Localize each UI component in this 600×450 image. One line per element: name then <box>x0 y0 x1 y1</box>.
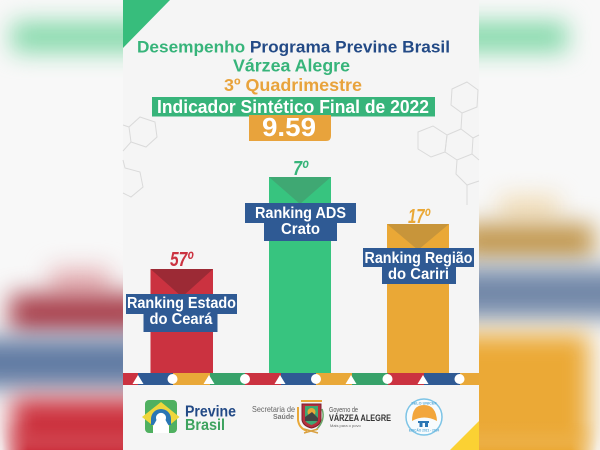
title line 2: Várzea Alegre <box>233 56 350 76</box>
logo: Secretaria de Saúde: Saúde <box>273 414 294 421</box>
logo: Secretaria de Saúde: Secretaria de <box>252 405 295 414</box>
logo: Secretaria de Saúde <box>252 405 295 421</box>
rank 7: 7º <box>293 158 309 180</box>
label: Ranking ADS Crato: Ranking ADS <box>255 205 346 222</box>
logo: Governo de Várzea Alegre: Governo de <box>329 407 358 414</box>
logo: Governo de Várzea Alegre <box>329 407 391 428</box>
label: Ranking Estado do Ceará <box>126 294 237 332</box>
logo: circular seal <box>406 399 442 435</box>
decorative coloured strip <box>123 373 479 385</box>
label: Ranking Estado do Ceará: do Ceará <box>150 311 213 328</box>
label: Ranking Região do Cariri: do Cariri <box>388 266 449 283</box>
label: Ranking Região do Cariri <box>363 248 474 284</box>
yellow corner triangle <box>450 421 479 450</box>
logo: Previne Brasil: Previne <box>185 404 236 420</box>
central panel background <box>123 0 479 450</box>
logo: Governo de Várzea Alegre: Mais para o povo <box>330 423 361 428</box>
green corner triangle <box>123 0 170 48</box>
logo: Previne Brasil <box>142 400 236 434</box>
label: Ranking Estado do Ceará: Ranking Estado <box>127 295 236 312</box>
score badge <box>249 112 331 142</box>
label: Ranking Região do Cariri: Ranking Região <box>364 250 472 267</box>
title <box>137 38 450 95</box>
indicator banner: Indicador Sintético Final de 2022 <box>157 96 429 117</box>
rank 17: 17º <box>408 206 431 228</box>
logo: Previne Brasil: Brasil <box>185 417 225 434</box>
title line 1: Desempenho Programa Previne Brasil <box>137 38 450 56</box>
bar: Ranking ADS Crato <box>245 158 356 373</box>
score badge: 9.59 <box>262 112 316 142</box>
label: Ranking ADS Crato <box>245 203 356 241</box>
logo: circular seal: SELO UNICEF <box>411 402 437 406</box>
bar: Ranking Região do Cariri <box>363 206 474 373</box>
label: Ranking ADS Crato: Crato <box>281 221 320 238</box>
logo: Governo de Várzea Alegre: VÁRZEA ALEGRE <box>329 413 391 423</box>
bar: Ranking Estado do Ceará <box>126 249 237 373</box>
logo icon <box>142 400 180 433</box>
municipal crest <box>298 400 323 433</box>
hexagon pattern <box>123 82 479 205</box>
blurred background: left side <box>0 5 123 450</box>
blurred background: right side <box>479 5 600 450</box>
title line 3: 3º Quadrimestre <box>224 75 362 95</box>
rank 57: 57º <box>170 249 194 271</box>
logo: circular seal: EDIÇÃO 2021 - 2024 <box>409 428 439 432</box>
